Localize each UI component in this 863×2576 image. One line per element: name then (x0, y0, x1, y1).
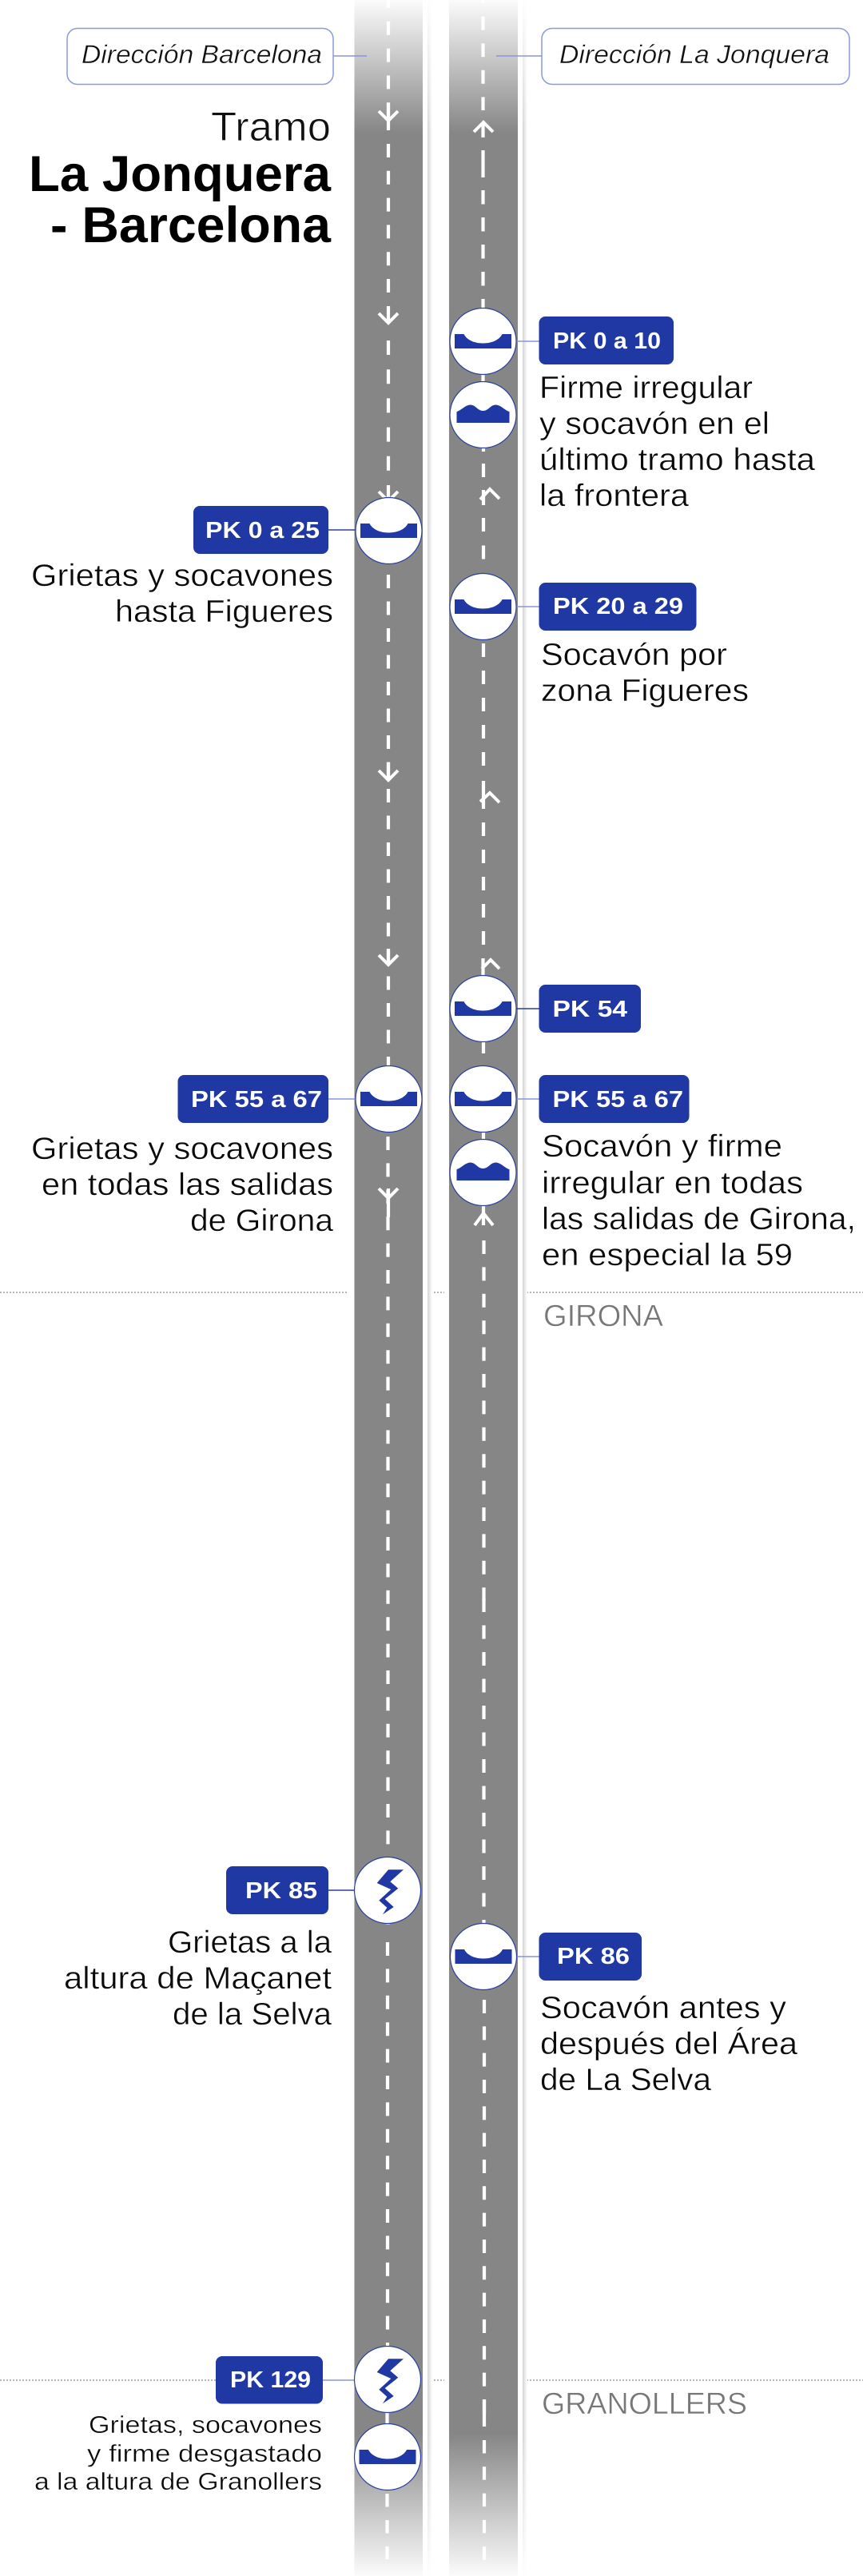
description: después del Área (540, 2027, 798, 2061)
callout: PK 129 (34, 2347, 420, 2495)
callout: PK 54 (450, 975, 641, 1042)
description (64, 1925, 332, 2032)
icon: pothole (356, 1066, 422, 1132)
place label: Granollers: GRANOLLERS (542, 2387, 747, 2421)
description: Firme irregular (539, 371, 753, 405)
description: y firme desgastado (87, 2439, 322, 2467)
badge (539, 583, 697, 631)
icon: pothole (356, 497, 422, 564)
badge (177, 1075, 328, 1123)
icon: pothole (450, 309, 516, 374)
description: a la altura de Granollers (34, 2467, 322, 2495)
icon: pothole (450, 1066, 516, 1132)
callout: PK 85 (64, 1857, 420, 2032)
badge (539, 985, 641, 1033)
callout: PK 55 a 67 left (31, 1066, 422, 1238)
icon: pothole (451, 1923, 516, 1990)
callout: PK 20 a 29 (450, 574, 749, 708)
lane dashes: left carriageway (387, 0, 388, 2559)
title: - Barcelona (50, 197, 332, 253)
badge: PK 0 a 25 (205, 518, 320, 543)
description: Grietas a la (168, 1925, 332, 1960)
badge: PK 55 a 67 (191, 1087, 322, 1113)
icon: uneven surface (450, 382, 516, 448)
lane dashes: right carriageway (483, 0, 484, 2560)
title: Tramo (211, 104, 331, 149)
description: la frontera (539, 479, 690, 513)
description: de la Selva (173, 1997, 332, 2032)
badge (539, 1075, 689, 1123)
description (540, 1991, 798, 2097)
direction label: La Jonquera: Dirección La Jonquera (559, 40, 829, 69)
icon: uneven surface (450, 1140, 516, 1205)
description (31, 1132, 334, 1238)
callout: PK 0 a 10 (450, 309, 816, 513)
callout: PK 86 (451, 1923, 798, 2097)
badge: PK 86 (557, 1944, 630, 1969)
badge (539, 1933, 642, 1981)
description: en todas las salidas (42, 1168, 333, 1202)
badge: PK 55 a 67 (553, 1087, 683, 1113)
direction arrows: left carriageway (379, 111, 398, 1198)
icon: crack (355, 2347, 420, 2412)
direction label: Barcelona: Dirección Barcelona (82, 40, 322, 69)
title: La Jonquera (29, 146, 332, 202)
direction label: La Jonquera (496, 29, 849, 85)
description: Grietas y socavones (31, 1132, 333, 1166)
badge: PK 54 (553, 997, 627, 1022)
description (541, 638, 749, 708)
description: y socavón en el (539, 407, 770, 441)
badge: PK 129 (230, 2367, 311, 2393)
direction arrows: right carriageway (474, 122, 499, 1225)
icon: pothole (450, 975, 516, 1042)
description: Socavón por (541, 638, 727, 672)
badge (216, 2356, 323, 2404)
badge: PK 85 (245, 1878, 317, 1904)
badge (226, 1866, 328, 1914)
place label: Girona: GIRONA (543, 1300, 664, 1333)
badge (193, 506, 328, 554)
icon: crack (355, 1857, 420, 1923)
direction label: Barcelona (67, 29, 367, 85)
title (29, 104, 332, 253)
road: right carriageway (449, 0, 527, 2576)
badge (539, 317, 674, 364)
description (542, 1129, 856, 1272)
description: zona Figueres (541, 674, 749, 708)
callout: PK 55 a 67 right (450, 1066, 856, 1272)
description: Grietas, socavones (89, 2411, 322, 2439)
description (31, 559, 333, 629)
icon: pothole (450, 574, 516, 639)
description: de Girona (190, 1204, 334, 1238)
badge: PK 20 a 29 (553, 594, 683, 619)
description: Socavón antes y (540, 1991, 787, 2025)
description: Socavón y firme (542, 1129, 782, 1164)
description: las salidas de Girona, (542, 1202, 856, 1236)
description: Grietas y socavones (31, 559, 333, 593)
description: último tramo hasta (539, 443, 816, 477)
description: hasta Figueres (115, 595, 333, 629)
road: left carriageway (355, 0, 432, 2576)
badge: PK 0 a 10 (553, 328, 661, 354)
description: altura de Maçanet (64, 1961, 332, 1996)
description (34, 2411, 322, 2495)
description: en especial la 59 (542, 1238, 793, 1272)
icon: pothole (355, 2423, 420, 2490)
callout: PK 0 a 25 (31, 497, 422, 629)
description (539, 371, 816, 513)
description: de La Selva (540, 2063, 712, 2097)
description: irregular en todas (542, 1166, 803, 1200)
